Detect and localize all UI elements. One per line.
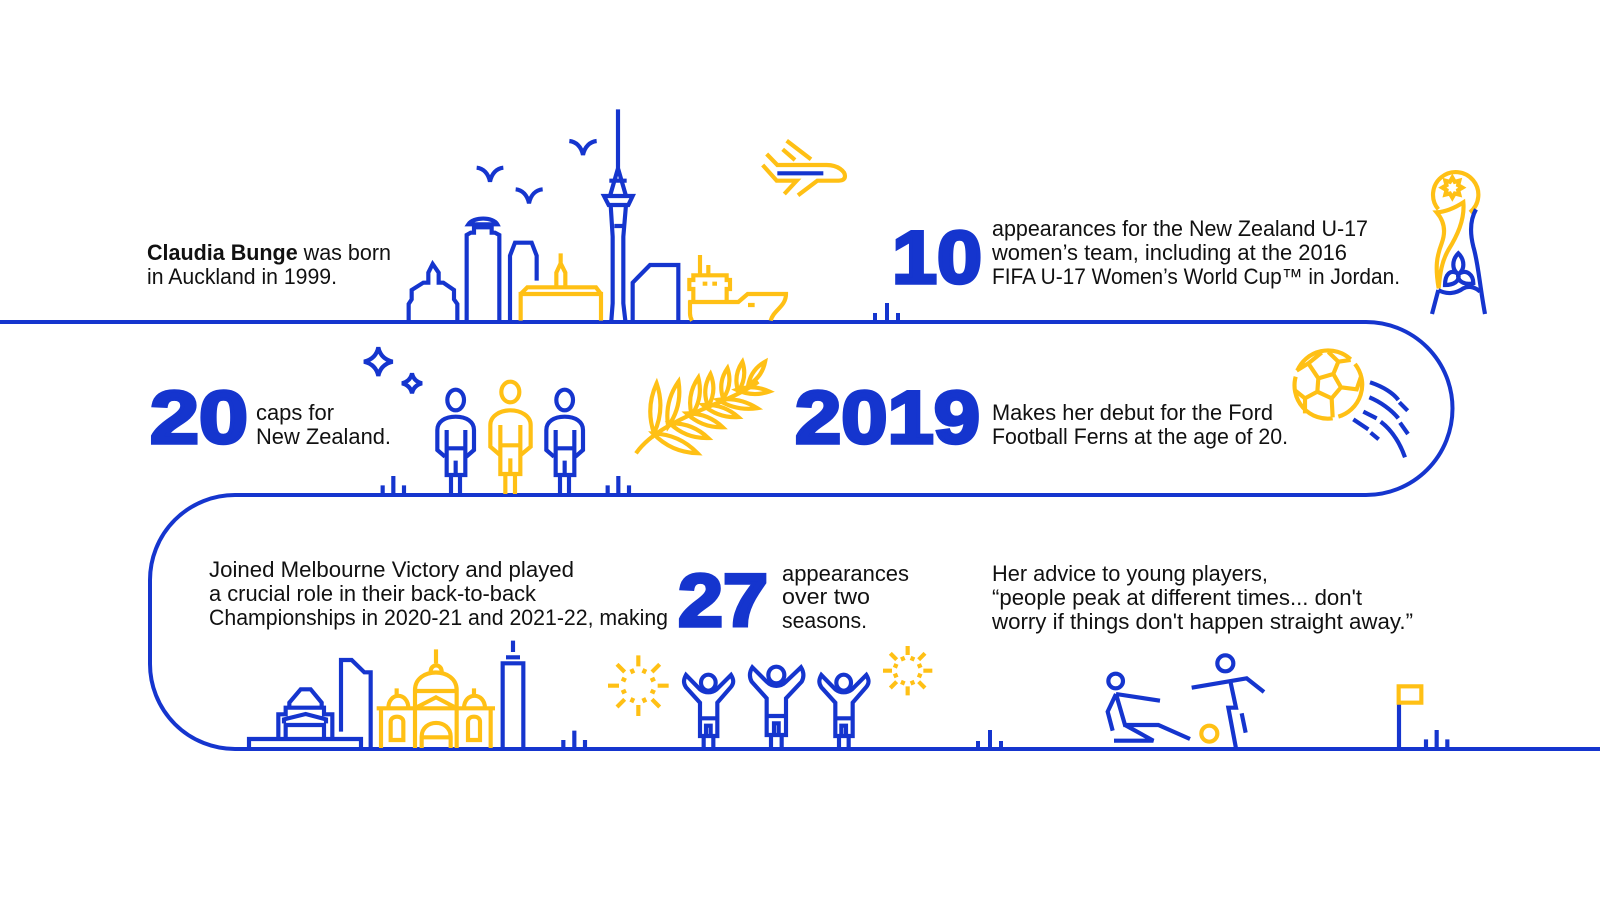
text: Melbourne Victory [209,557,668,630]
blue tower [503,641,523,748]
text: U-17 appearances [991,216,1400,289]
Sky Tower [604,109,633,321]
kicking player [1192,655,1264,748]
text: Melbourne Victory: Championships in 2020-21 and 2021-22, making [209,605,668,630]
building: tall round top [467,219,499,321]
text: appearances over two seasons: over two [782,584,870,609]
text: caps: New Zealand. [256,424,391,449]
illustration: Auckland skyline, birds and ship [409,109,845,321]
text: appearances over two seasons: seasons. [782,608,867,633]
birds [477,141,597,203]
number 27: 27 [678,559,768,642]
text: appearances over two seasons: appearances [782,561,909,586]
icon: trophy [1432,172,1485,314]
text: U-17 appearances: appearances for the New Zealand U-17 [992,216,1368,241]
Flinders Street Station [377,649,495,748]
text: appearances over two seasons [782,561,909,633]
player: blue left [437,390,474,494]
text: advice quote: Her advice to young players, [992,561,1268,586]
stars [364,347,422,393]
text: caps: caps for [256,400,334,425]
text: birth: Claudia Bunge was born [147,240,391,265]
grass tufts [383,476,629,493]
text: advice quote: “people peak at different times... don't [992,585,1362,610]
text: debut: Football Ferns at the age of 20. [992,424,1288,449]
text: debut: Makes her debut for the Ford [992,400,1273,425]
illustration: Melbourne skyline [249,641,585,748]
grass tuft [1426,730,1447,749]
text: advice quote [991,561,1413,634]
text: Melbourne Victory: Joined Melbourne Victory and played [209,557,574,582]
icon: football with motion lines [1295,350,1408,457]
text: Melbourne Victory: a crucial role in their back-to-back [209,581,537,606]
text: birth [147,240,391,289]
illustration: players, ball and corner flag [1108,655,1447,749]
airplane [763,141,845,195]
shrine [249,689,361,748]
cheering player left [684,675,733,748]
number 2019: 2019 [795,376,980,459]
corner flag [1399,686,1421,749]
grass tuft bottom middle [978,730,1001,749]
cheering player centre [750,667,803,748]
text: debut [992,400,1288,449]
building: domed [409,264,457,321]
ball [1201,726,1217,742]
tall building [341,660,371,748]
text: advice quote: worry if things don't happen straight away.” [991,609,1413,634]
illustration: team, stars, fern [364,347,769,494]
ship [688,255,786,321]
building: sloped roof [633,265,678,321]
player: yellow [490,382,531,494]
text: caps [256,400,391,449]
sliding player [1108,674,1190,741]
grass tuft [563,731,585,748]
firework left [608,655,669,716]
illustration: celebrating players and fireworks [608,646,932,748]
grass tuft top row [875,303,898,322]
text: U-17 appearances: women’s team, including at the 2016 [991,240,1347,265]
firework right [883,646,932,695]
building: angled top [510,243,537,321]
silver fern [636,360,769,458]
number 20: 20 [150,376,248,459]
text: U-17 appearances: FIFA U-17 Women’s World Cup™ in Jordan. [992,264,1400,289]
winding timeline path [0,322,1600,749]
text: birth: in Auckland in 1999. [147,264,337,289]
cheering player right [819,675,869,748]
building: yellow hall [521,253,601,321]
number 10: 10 [892,216,982,299]
player: blue right [546,390,583,494]
